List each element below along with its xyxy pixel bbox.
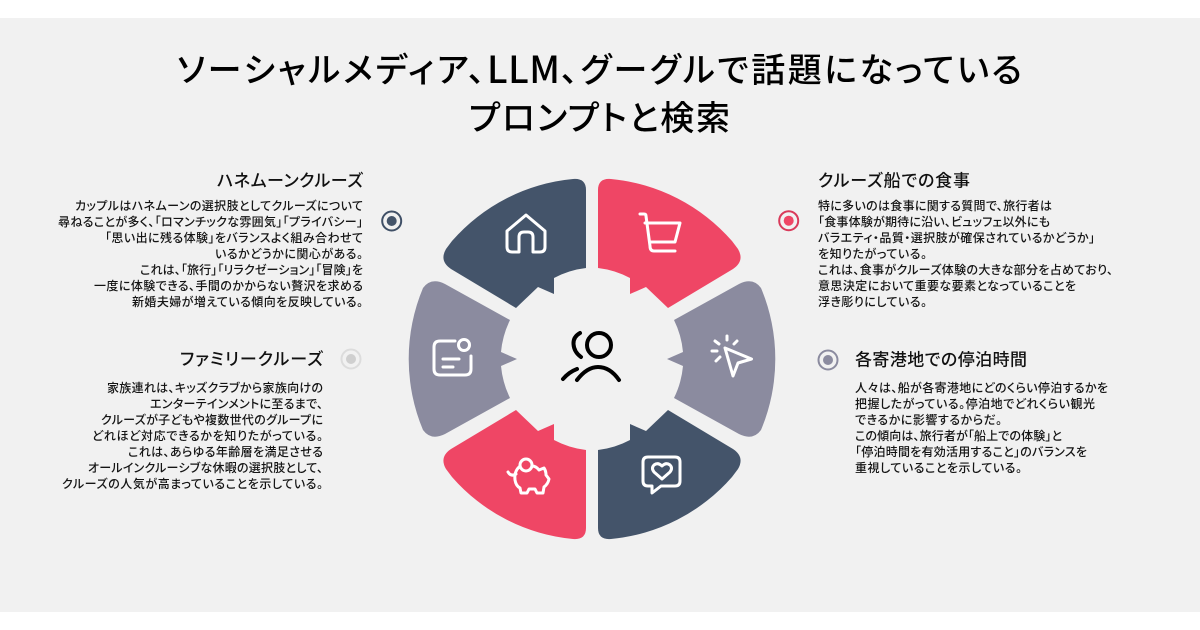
panel: family cruise text: 家族連れは、キッズクラブから家族向けの [107, 380, 323, 395]
marker: family [342, 350, 360, 368]
panel: dining text: を知りたがっている。 [818, 246, 927, 261]
panel: honeymoon cruise text [58, 170, 364, 309]
segment: bottom left red [443, 410, 586, 539]
icon: cursor click [712, 336, 752, 376]
panel: port stay text: 各寄港地での停泊時間 [855, 350, 1027, 370]
title: ソーシャルメディア、 [177, 43, 485, 92]
panel: dining text: 意思決定において重要な要素となっていることを [818, 278, 1076, 293]
panel: honeymoon cruise text: これは、「旅行」「リラクゼーション」「冒険」を [140, 262, 363, 277]
panel: family cruise text: ファミリークルーズ [180, 349, 324, 369]
panel: port stay text: 把握したがっている。停泊地でどれくらい観光 [855, 396, 1095, 411]
marker: honeymoon [382, 212, 401, 230]
segment: left gray [409, 281, 517, 437]
panel: family cruise text: オールインクルーシブな休暇の選択肢として、 [88, 460, 323, 475]
panel: port stay text: 人々は、船が各寄港地にどのくらい停泊するかを [855, 380, 1108, 395]
marker: port stay [818, 350, 838, 370]
panel: port stay text: 「停泊時間を有効活用すること」のバランスを [855, 444, 1087, 459]
panel: port stay text: 重視していることを示している。 [855, 460, 1022, 475]
icon: chat heart [643, 457, 680, 493]
panel: dining text: 浮き彫りにしている。 [818, 295, 927, 309]
title: LLM [487, 40, 560, 94]
panel: honeymoon cruise text: いるかどうかに関心がある。 [215, 246, 363, 261]
panel: port stay text: できるかに影響するからだ。 [855, 412, 1002, 427]
panel: dining text: バラエティ・品質・選択肢が確保されているかどうか」 [818, 230, 1095, 245]
panel: honeymoon cruise text: 尋ねることが多く、「ロマンチックな雰囲気」「プライバシー」 [58, 214, 363, 229]
panel: honeymoon cruise text: 新婚夫婦が増えている傾向を反映している。 [132, 294, 363, 309]
segment: top left navy [443, 179, 586, 308]
panel: dining text: クルーズ船での食事 [818, 170, 970, 190]
icon: shopping cart [640, 214, 680, 251]
icon: home [507, 215, 545, 252]
panel: port stay text: この傾向は、旅行者が「船上での体験」と [855, 428, 1062, 443]
icon: document badge [434, 340, 471, 375]
segment: top right red [598, 179, 741, 308]
panel: honeymoon cruise text: カップルはハネムーンの選択肢としてクルーズについて [75, 198, 363, 213]
panel: dining text [818, 170, 1113, 309]
panel: honeymoon cruise text: 「思い出に残る体験」をバランスよく組み合わせて [105, 230, 363, 245]
title: プロンプトと検索 [469, 91, 730, 140]
segment: bottom right navy [598, 410, 741, 539]
panel: honeymoon cruise text: 一度に体験できる、手間のかからない贅沢を求める [94, 278, 363, 293]
panel: dining text: これは、食事がクルーズ体験の大きな部分を占めており、 [818, 262, 1113, 277]
segment: right gray [667, 281, 775, 437]
panel: honeymoon cruise text: ハネムーンクルーズ [217, 170, 364, 190]
panel: family cruise text [62, 349, 324, 491]
icon: center users [563, 333, 619, 380]
title: 、グーグルで話題になっている [561, 43, 1022, 92]
panel: port stay text [855, 350, 1108, 475]
panel: dining text: 特に多いのは食事に関する質問で、旅行者は [818, 198, 1052, 213]
panel: family cruise text: クルーズの人気が高まっていることを示している。 [62, 476, 323, 491]
marker: dining [779, 211, 798, 230]
panel: family cruise text: これは、あらゆる年齢層を満足させる [128, 444, 323, 459]
panel: family cruise text: エンターテインメントに至るまで、 [150, 397, 323, 411]
panel: family cruise text: どれほど対応できるかを知りたがっている。 [92, 428, 323, 443]
title [177, 40, 1022, 140]
icon: piggy bank [508, 459, 549, 493]
panel: family cruise text: クルーズが子どもや複数世代のグループに [101, 412, 323, 427]
panel: dining text: 「食事体験が期待に沿い、ビュッフェ以外にも [818, 214, 1050, 229]
